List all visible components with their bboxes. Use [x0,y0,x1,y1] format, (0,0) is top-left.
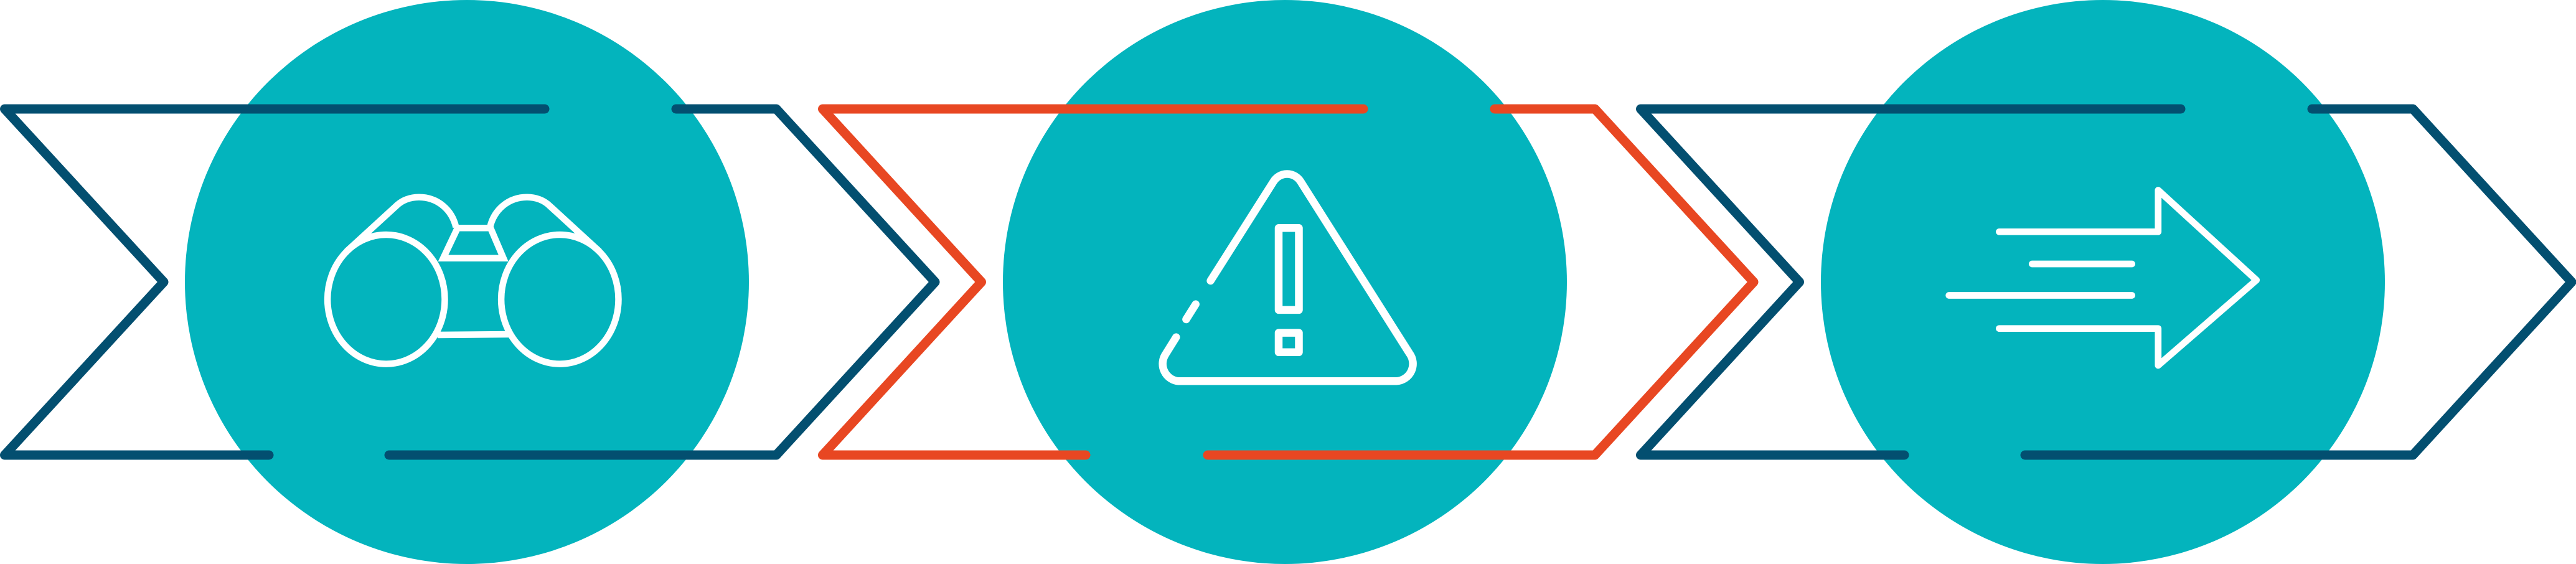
step 3 teal circle [1821,0,2385,564]
icon: warning triangle [1163,174,1413,381]
step 2 panel: warning [823,0,1754,564]
step 3 panel: move forward [1641,0,2572,564]
step 2 teal circle [1003,0,1567,564]
step 1 panel: observe [5,0,935,564]
step 3 navy chevron outline [1641,109,2572,455]
icon: speed arrow [1949,190,2257,365]
step 2 orange chevron outline [823,109,1754,455]
step 1 navy chevron outline [5,109,935,455]
step 1 teal circle [185,0,749,564]
icon: binoculars [327,197,619,364]
